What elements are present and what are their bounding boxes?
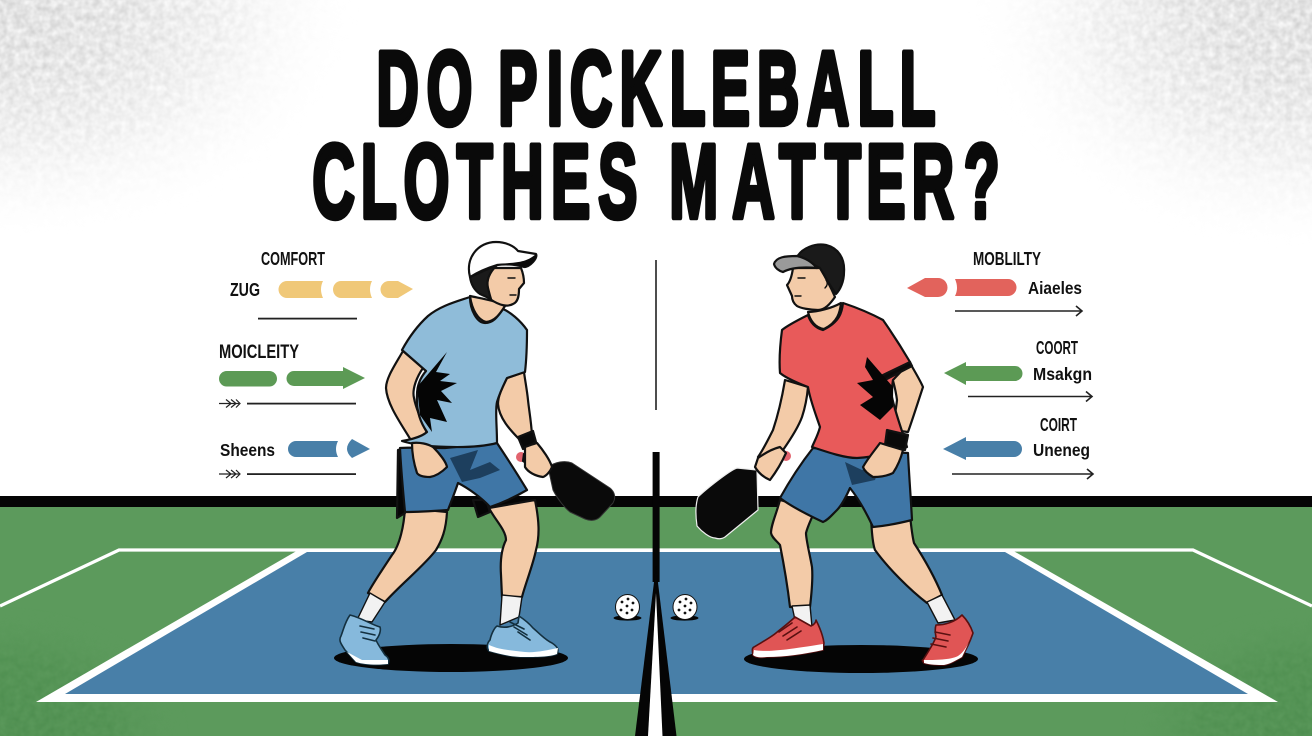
handle (516, 452, 526, 462)
arm: right (498, 372, 532, 440)
shirt fold shadow (417, 352, 457, 432)
wristband (518, 431, 536, 449)
title: CLOTHES MATTER? (312, 124, 1000, 241)
player: blue shirt (334, 242, 615, 672)
paddle (696, 468, 758, 539)
face details (795, 278, 827, 296)
shadow under player (744, 645, 978, 673)
right stat list (907, 249, 1093, 479)
label: coirt: COIRT (1040, 415, 1077, 435)
label: sheens: Sheens (220, 440, 275, 460)
socks (792, 605, 812, 627)
arrow line (955, 306, 1082, 316)
left stat list (219, 249, 413, 478)
t-shirt (780, 303, 910, 458)
arrow line (968, 392, 1092, 402)
shoes (340, 615, 389, 665)
cap brim (774, 256, 817, 272)
amber arrow (278, 281, 413, 298)
shirt fold shadow (857, 357, 893, 420)
hand right (863, 443, 903, 477)
label: aiaeles: Aiaeles (1028, 278, 1082, 298)
hair (470, 265, 497, 299)
net post (635, 452, 676, 736)
red arrow (907, 278, 1016, 297)
cap (469, 242, 536, 277)
sleeve cuff (881, 362, 912, 381)
t-shirt (402, 297, 527, 447)
court floor (0, 496, 1312, 736)
title: DO PICKLEBALL (376, 31, 936, 148)
neck (808, 303, 841, 329)
shorts (397, 448, 408, 518)
socks (357, 593, 385, 622)
legs (368, 508, 447, 602)
label: coort: COORT (1036, 338, 1078, 358)
green arrow (944, 362, 1023, 385)
blue arrow (943, 437, 1022, 460)
center divider line (655, 260, 657, 410)
blue arrow (288, 439, 370, 458)
legs (771, 500, 815, 607)
hand left (412, 443, 447, 477)
arrow marker (219, 400, 240, 408)
arm: right (892, 363, 923, 432)
pickleball right (670, 594, 698, 621)
shoes (752, 617, 824, 657)
label: mobility: MOBLILTY (973, 249, 1041, 269)
label: uneneg: Uneneg (1033, 440, 1090, 460)
wristband (885, 430, 908, 450)
title (312, 31, 1000, 241)
label: zug: ZUG (230, 280, 260, 300)
label: comfort: COMFORT (261, 249, 325, 269)
hand left (755, 447, 786, 480)
shorts (780, 448, 912, 527)
arrow marker (219, 470, 240, 478)
label: msakgn: Msakgn (1033, 364, 1092, 384)
face details (485, 278, 516, 295)
head (787, 268, 835, 310)
neck (470, 296, 505, 322)
player: red shirt (696, 245, 978, 673)
arrow line (952, 469, 1093, 479)
handle (781, 451, 791, 461)
arm: left (758, 380, 808, 457)
paddle (548, 462, 615, 520)
green arrow (219, 367, 365, 389)
pickleball left (614, 594, 642, 621)
shadow under player (334, 644, 568, 672)
hair (797, 245, 844, 294)
hand right (525, 443, 552, 477)
label: moicleity: MOICLEITY (219, 342, 299, 363)
arm: left (386, 351, 430, 442)
head (478, 268, 524, 306)
